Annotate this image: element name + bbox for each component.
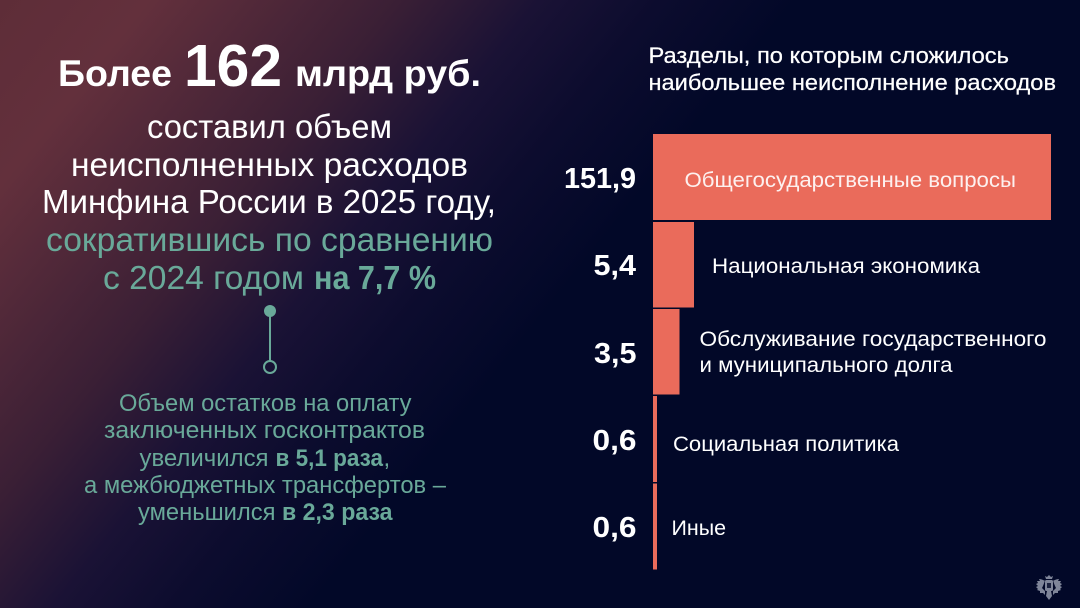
panel: left summary — [42, 33, 496, 526]
text block: contracts and transfers: в 2,3 раза — [282, 499, 393, 526]
text block: reduction highlight: с 2024 годом — [103, 260, 304, 297]
bar row: social policy: 0,6 — [592, 425, 636, 457]
bar row: debt service: Обслуживание государственного — [700, 327, 1047, 351]
text block: contracts and transfers — [84, 390, 447, 526]
text block: contracts and transfers: , — [384, 445, 390, 472]
text block: reduction highlight: на 7,7 % — [314, 260, 436, 297]
chart heading — [648, 43, 1056, 95]
chart heading: Разделы, по которым сложилось — [648, 43, 1009, 68]
bar row: national economy: Национальная экономика — [712, 254, 980, 278]
bar chart — [564, 134, 1051, 570]
bar row: debt service: 3,5 — [594, 338, 636, 370]
text block: contracts and transfers: уменьшился — [138, 499, 276, 526]
title: млрд руб. — [295, 52, 481, 94]
bar row: social policy — [592, 396, 899, 482]
panel: bar chart section — [564, 43, 1056, 570]
text block: contracts and transfers: в 5,1 раза — [276, 445, 384, 472]
bar row: debt service: и муниципального долга — [700, 353, 953, 377]
bar row: general state issues: 151,9 — [564, 163, 636, 195]
bar row: other — [592, 484, 726, 570]
text block: main statement: составил объем — [147, 109, 392, 146]
bar row: national economy — [594, 222, 980, 308]
text block: main statement: неисполненных расходов — [71, 147, 468, 184]
bar row: general state issues — [564, 134, 1051, 220]
text block: contracts and transfers: Объем остатков на оплату — [119, 390, 412, 417]
bar row: social policy: Социальная политика — [673, 432, 899, 456]
text block: main statement — [42, 109, 496, 221]
title: 162 — [184, 33, 282, 99]
icon: ministry emblem — [1036, 575, 1062, 600]
text block: main statement: Минфина России в 2025 году, — [42, 184, 496, 221]
text block: contracts and transfers: заключенных госконтрактов — [104, 417, 425, 444]
bar row: other: Иные — [672, 516, 726, 540]
bar row: debt service — [594, 309, 1047, 394]
connector: dot and ring — [264, 305, 276, 373]
title — [58, 33, 481, 99]
text block: contracts and transfers: увеличился — [140, 445, 268, 472]
text block: reduction highlight — [46, 222, 493, 297]
bar row: other: 0,6 — [592, 512, 636, 544]
title: Более — [58, 52, 172, 94]
text block: contracts and transfers: а межбюджетных трансфертов – — [84, 472, 447, 499]
bar row: national economy: 5,4 — [594, 250, 636, 282]
bar row: general state issues: Общегосударственные вопросы — [684, 168, 1016, 192]
text block: reduction highlight: сократившись по сравнению — [46, 222, 493, 259]
chart heading: наибольшее неисполнение расходов — [648, 70, 1056, 95]
